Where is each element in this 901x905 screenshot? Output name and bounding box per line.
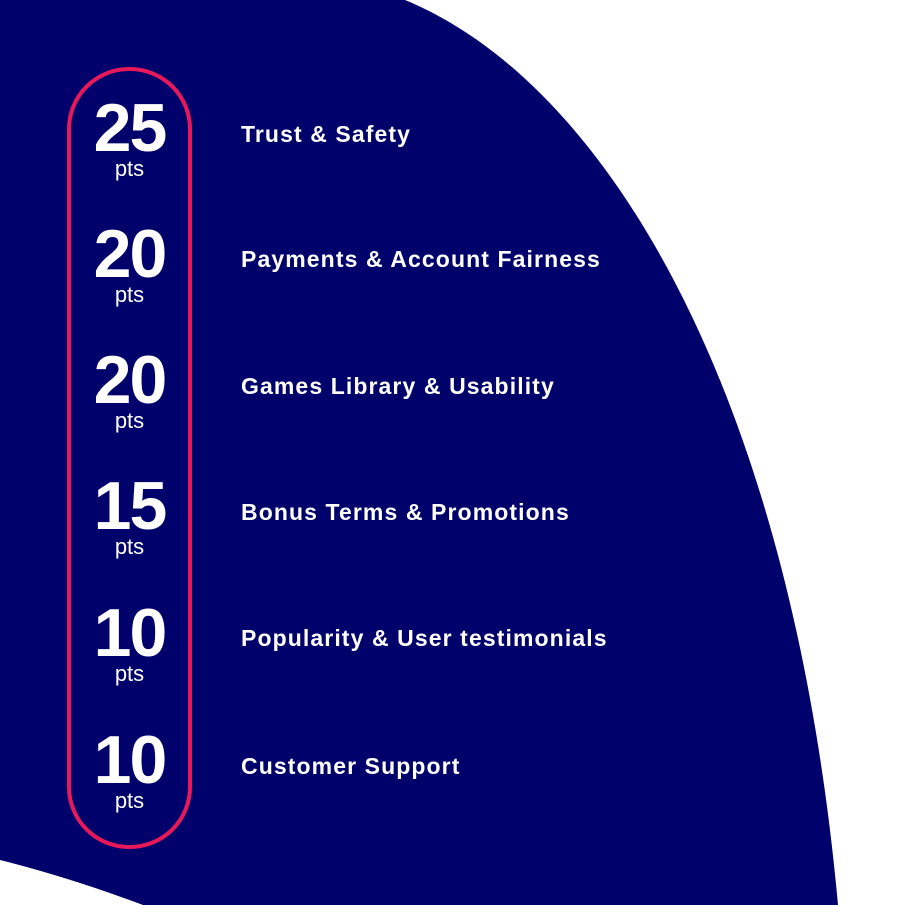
score 20 b: 20 <box>94 342 165 418</box>
label: Games: Games Library & Usability <box>241 373 555 399</box>
label: Popularity: Popularity & User testimonials <box>241 625 608 651</box>
score 15: 15 <box>94 468 165 544</box>
score 20: pts <box>115 282 144 307</box>
score 10 b: pts <box>115 788 144 813</box>
score 10: 10 <box>94 595 165 671</box>
label: Bonus: Bonus Terms & Promotions <box>241 499 570 525</box>
score 10 b: 10 <box>94 722 165 798</box>
label: Customer Support: Customer Support <box>241 753 460 779</box>
score 10: pts <box>115 661 144 686</box>
score 20 b: pts <box>115 408 144 433</box>
label: Trust & Safety: Trust & Safety <box>241 121 411 147</box>
score 20: 20 <box>94 216 165 292</box>
score 25: pts <box>115 156 144 181</box>
score 25: 25 <box>94 90 165 166</box>
label: Payments: Payments & Account Fairness <box>241 246 601 272</box>
score 15: pts <box>115 534 144 559</box>
